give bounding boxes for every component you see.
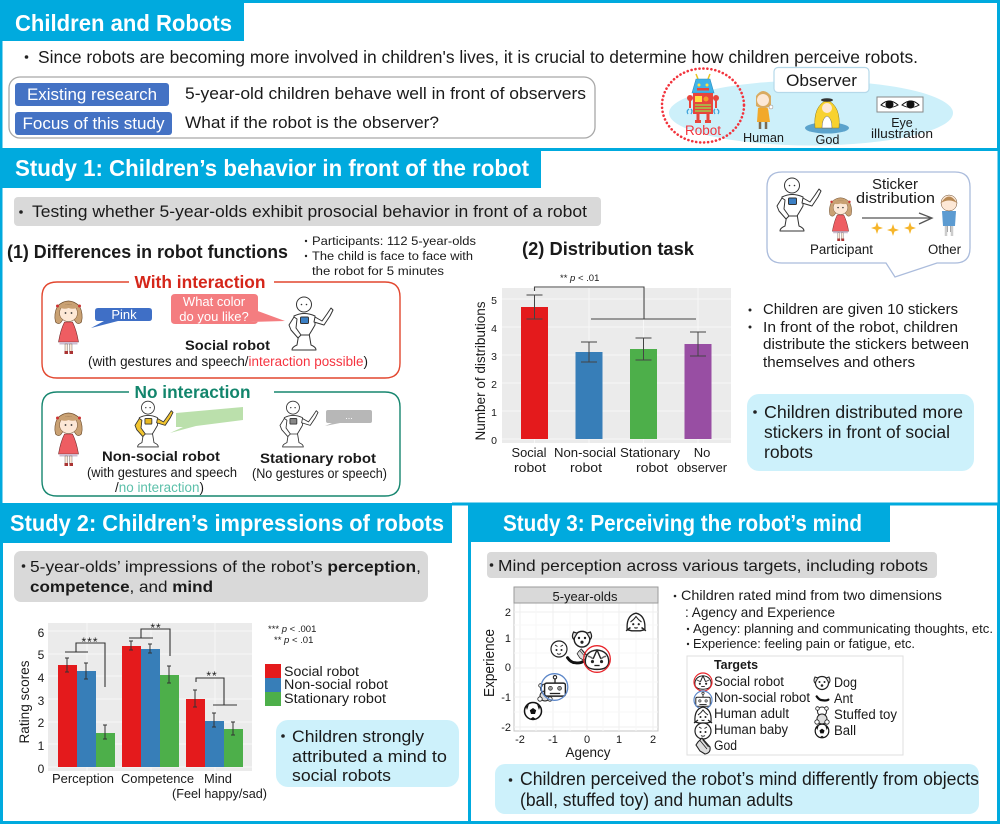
axis titles: Agency [566, 744, 610, 760]
observer label [774, 68, 869, 92]
callout: study 3 finding: (ball, stuffed toy) and human adults [520, 790, 793, 810]
y axis labels: -1 [501, 692, 511, 704]
legend: Stationary robot [284, 691, 386, 706]
x axis labels: 0 [584, 734, 590, 746]
y axis labels: 2 [38, 716, 45, 730]
y axis labels [491, 295, 497, 447]
icon: other child [941, 195, 957, 236]
callout: study 2 finding: social robots [292, 767, 391, 785]
label: no interaction: No interaction [134, 382, 250, 402]
dimensions description [674, 587, 993, 651]
sticker distribution label: Sticker [872, 177, 918, 193]
x axis labels [512, 445, 728, 475]
existing research statement: 5-year-old children behave well in front of observers [185, 85, 586, 103]
x axis labels [515, 734, 656, 746]
legend: targets [687, 656, 903, 755]
bars [58, 646, 243, 767]
icon: stickers [871, 222, 916, 236]
icon: human: Human [743, 130, 784, 145]
heading: children and robots: Children and Robots [15, 10, 232, 36]
icon: child [55, 413, 82, 466]
y axis labels: 4 [491, 323, 497, 335]
study 3 aim [487, 552, 937, 578]
task description: Children are given 10 stickers [763, 302, 958, 318]
chart strip title [514, 587, 658, 604]
research question box [9, 77, 595, 138]
callout: study 1 finding: stickers in front of social [764, 422, 950, 442]
study 1 aim [14, 197, 601, 226]
participant and other labels [810, 242, 961, 257]
error bars [65, 641, 235, 739]
dimensions description: Agency: planning and communicating thoughts, etc. [693, 621, 993, 636]
label: with interaction: With interaction [134, 272, 266, 292]
legend: targets: Dog [834, 675, 857, 690]
significance brackets: *** [81, 635, 99, 649]
y axis labels: 1 [38, 739, 45, 753]
icon: eye illustration [871, 97, 933, 141]
legend: targets: Social robot [714, 674, 784, 689]
y axis labels: 6 [38, 626, 45, 640]
social robot label [88, 337, 368, 369]
significance brackets: ** [206, 669, 218, 683]
x axis labels: robot [514, 460, 546, 475]
x axis labels: Perception [52, 771, 114, 786]
data icons [524, 613, 646, 720]
callout: study 3 finding [495, 764, 979, 814]
icon: robot in dotted circle [662, 68, 744, 142]
legend: targets: Stuffed toy [834, 707, 897, 722]
speech bubble: what color: What color [183, 294, 246, 309]
heading: study 1 [0, 148, 1000, 188]
dimensions description: Children rated mind from two dimensions [681, 587, 942, 603]
non-social robot label: (with gestures and speech [87, 465, 237, 480]
icon: stationary robot [280, 401, 318, 447]
participants note: The child is face to face with [312, 249, 473, 263]
y axis labels: 1 [505, 633, 511, 645]
y axis labels: 3 [38, 694, 45, 708]
legend [265, 664, 388, 706]
panel: study 3 [470, 503, 1000, 822]
legend: targets: Non-social robot [714, 690, 810, 705]
participant and other labels: Other [928, 242, 961, 257]
label: focus of this study: Focus of this study [22, 115, 165, 133]
x axis labels: Mind [204, 771, 232, 786]
icon: non-social robot [135, 401, 173, 447]
legend: targets: Targets [714, 657, 758, 672]
observer label: Observer [786, 72, 858, 90]
significance brackets: ** [150, 621, 162, 635]
x axis labels: Social [512, 445, 547, 460]
study 1 aim: Testing whether 5-year-olds exhibit prosocial behavior in front of a robot [32, 202, 587, 221]
significance brackets [65, 621, 237, 705]
callout: study 2 finding: attributed a mind to [292, 748, 447, 766]
speech bubble: what color [171, 294, 285, 324]
icon: robot in dotted circle: Robot [685, 123, 721, 138]
speech bubble: stationary robot [325, 410, 372, 426]
dimensions description: Experience: feeling pain or fatigue, etc. [693, 636, 915, 651]
x axis labels: Stationary [620, 445, 680, 460]
x axis labels: -2 [515, 734, 525, 746]
significance bracket [534, 273, 696, 319]
x axis labels: Competence [121, 771, 194, 786]
y axis labels: 5 [38, 648, 45, 662]
legend: Social robot [284, 664, 359, 679]
participants note: Participants: 112 5-year-olds [312, 234, 476, 248]
speech bubble: non-social robot [170, 407, 243, 433]
sticker distribution label: distribution [856, 191, 935, 207]
icon: god: God [816, 132, 840, 147]
axis titles: Experience [482, 629, 498, 697]
participant and other labels: Participant [810, 242, 873, 257]
task description: distribute the stickers between [763, 337, 969, 353]
x axis labels: 2 [650, 734, 656, 746]
non-social robot label: Non-social robot [102, 448, 220, 464]
panel: with interaction [42, 272, 400, 378]
legend: targets: Human adult [714, 706, 789, 721]
axis titles [482, 629, 610, 760]
icon: child [55, 301, 82, 354]
social robot label: Social robot [185, 337, 270, 353]
panel: study 2 [0, 503, 470, 822]
participants note: the robot for 5 minutes [312, 264, 444, 278]
stationary robot label: (No gestures or speech) [252, 466, 387, 481]
icon: social robot [289, 297, 333, 350]
icon: human [743, 91, 784, 145]
heading: study 3 [470, 503, 890, 542]
callout: study 2 finding: Children strongly [292, 728, 425, 746]
significance key: *** p < .001 [268, 624, 316, 635]
y axis labels [38, 626, 45, 776]
callout: study 1 finding: Children distributed more [764, 402, 963, 422]
stationary robot label: Stationary robot [260, 450, 376, 466]
stationary robot label [252, 450, 387, 481]
y axis labels [501, 607, 511, 734]
heading: study 1: Study 1: Children’s behavior in front of the robot [15, 155, 529, 181]
legend: targets: Human baby [714, 722, 788, 737]
significance key: ** p < .01 [274, 635, 313, 646]
y axis title: Rating scores [16, 660, 32, 744]
x axis labels: 1 [616, 734, 622, 746]
heading: study 3: Study 3: Perceiving the robot’s mind [503, 510, 862, 536]
task description: themselves and others [763, 355, 915, 371]
study 2 aim: 5-year-olds’ impressions of the robot’s perception , [30, 559, 421, 576]
heading: children and robots [0, 0, 244, 41]
significance bracket: ** p < .01 [560, 273, 599, 284]
x axis labels [52, 771, 267, 801]
legend: targets: God [714, 738, 737, 753]
task description [748, 302, 969, 371]
participants note [305, 234, 476, 278]
speech bubble: stationary robot: ... [345, 411, 353, 421]
panel: no interaction [42, 382, 400, 496]
significance key [268, 624, 316, 646]
sticker distribution speech bubble [767, 172, 970, 277]
social robot label: (with gestures and speech/interaction possible) [88, 354, 368, 369]
label: existing research [15, 83, 169, 106]
speech bubble: what color: do you like? [179, 309, 249, 324]
legend: Non-social robot [284, 677, 388, 692]
bar chart: rating scores [16, 621, 267, 801]
icon: eye illustration: illustration [871, 127, 933, 141]
callout: study 1 finding: robots [764, 442, 813, 462]
dimensions description: : Agency and Experience [685, 604, 835, 620]
arrow: sticker distribution [862, 213, 932, 224]
heading: study 2: Study 2: Children’s impressions of robots [10, 510, 444, 536]
icon: god [805, 98, 849, 147]
study 2 aim: competence , and mind [30, 579, 213, 596]
x axis labels: Non-social [554, 445, 616, 460]
sticker distribution label [856, 177, 935, 207]
x axis labels: robot [570, 460, 602, 475]
observer diagram [662, 68, 953, 147]
y axis labels: 4 [38, 671, 45, 685]
error bars [526, 295, 706, 362]
panel: children and robots [0, 0, 998, 150]
speech bubble: pink [91, 307, 152, 328]
callout: study 1 finding [747, 394, 974, 471]
bar chart: number of distributions [473, 273, 731, 475]
label: focus of this study [15, 112, 172, 135]
legend: targets: Ant [834, 691, 853, 706]
y axis labels: 2 [491, 379, 497, 391]
y axis labels: 3 [491, 351, 497, 363]
y axis labels: 0 [38, 762, 45, 776]
y axis labels: 0 [505, 662, 511, 674]
y axis labels: 1 [491, 407, 497, 419]
icon: participant [829, 198, 852, 241]
y axis labels: 5 [491, 295, 497, 307]
task description: In front of the robot, children [763, 320, 958, 336]
speech bubble: pink: Pink [111, 307, 137, 322]
label: existing research: Existing research [27, 86, 157, 104]
study 2 aim [14, 551, 428, 602]
subheading: distribution task: (2) Distribution task [522, 239, 695, 259]
panel: study 1 [0, 148, 1000, 504]
subheading: robot functions: (1) Differences in robot functions [7, 242, 288, 262]
callout: study 3 finding: Children perceived the robot’s mind differently from objects [520, 769, 979, 789]
study 3 aim: Mind perception across various targets, including robots [498, 558, 928, 575]
x axis labels: (Feel happy/sad) [172, 786, 267, 801]
heading: study 2 [0, 503, 452, 543]
scatter chart: agency and experience [482, 587, 658, 760]
y axis labels: 2 [505, 607, 511, 619]
bars [521, 307, 712, 439]
icon: eye illustration: Eye [891, 116, 913, 130]
chart strip title: 5-year-olds [552, 589, 618, 604]
x axis labels: robot [636, 460, 668, 475]
legend: targets: Ball [834, 723, 856, 738]
icon: robot [777, 178, 821, 231]
y axis title: Number of distributions [473, 301, 488, 440]
non-social robot label: /no interaction) [115, 480, 204, 495]
y axis labels: -2 [501, 722, 511, 734]
x axis labels: No [694, 445, 710, 460]
x axis labels: observer [677, 460, 728, 475]
y axis labels: 0 [491, 435, 497, 447]
non-social robot label [87, 448, 237, 495]
x axis labels: -1 [548, 734, 558, 746]
callout: study 2 finding [276, 720, 459, 787]
intro text: Since robots are becoming more involved in children's lives, it is crucial to determine how children perceive robots. [38, 47, 918, 67]
study focus statement: What if the robot is the observer? [185, 114, 439, 132]
